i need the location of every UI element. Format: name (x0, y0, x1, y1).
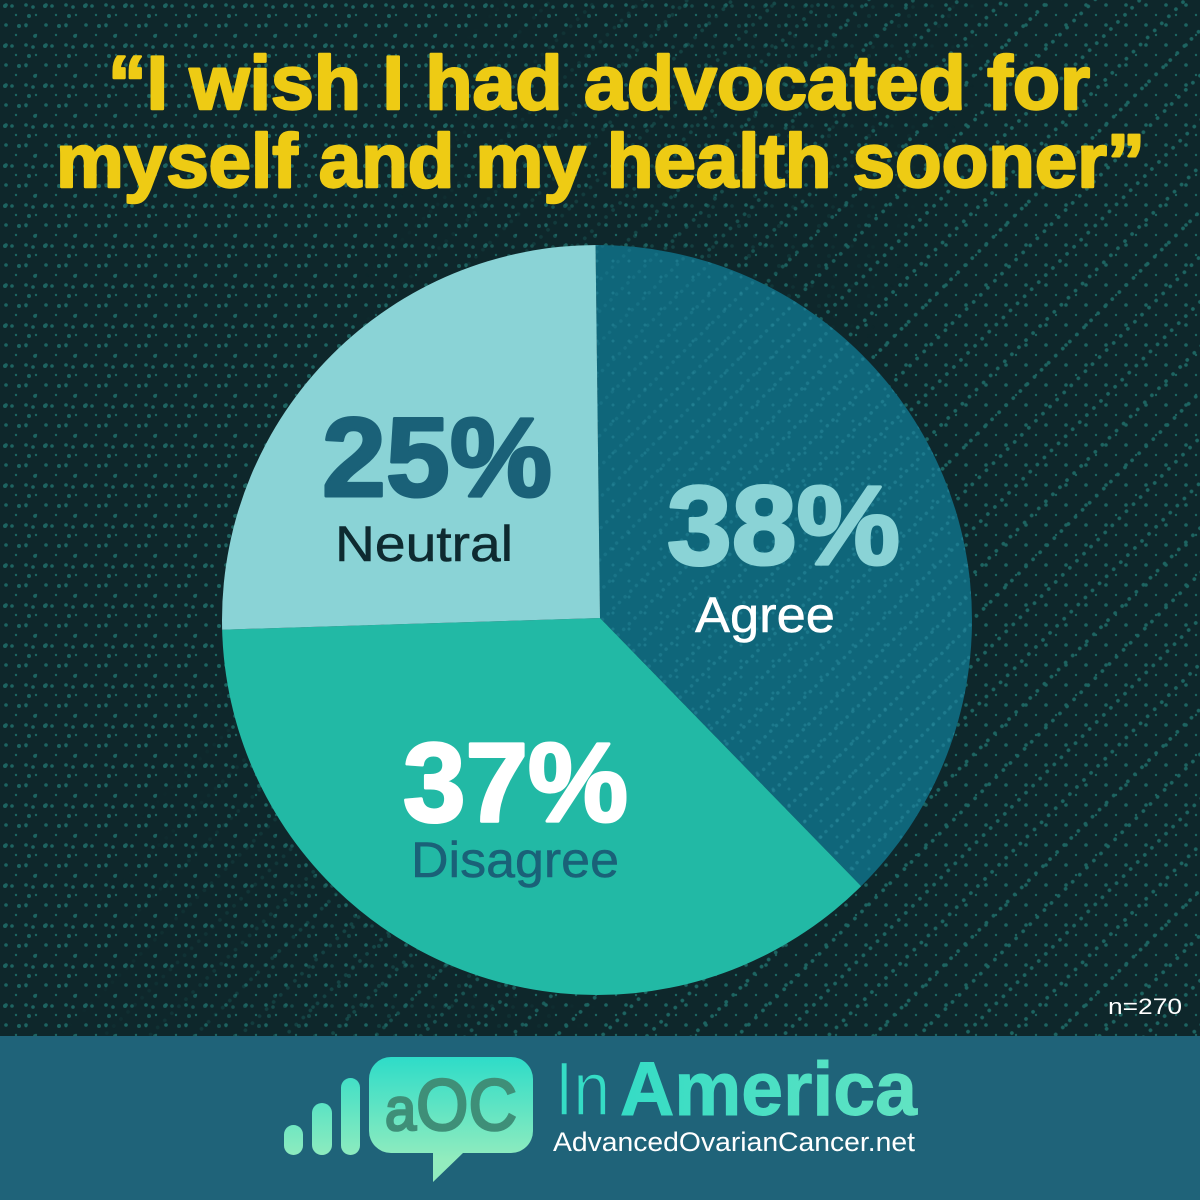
pie chart (222, 245, 972, 995)
logo: speech bubble with aOC: aOC (385, 1066, 517, 1146)
label: 37% disagree: Disagree (411, 832, 619, 888)
logo wordmark: In America: America (620, 1047, 918, 1132)
label: 38% agree (667, 463, 900, 643)
footer band (0, 1036, 1200, 1200)
label: 37% disagree: 37% (403, 720, 628, 845)
title: myself and my health sooner” (56, 119, 1145, 204)
sample size note: n=270 (1108, 994, 1182, 1019)
label: 25% neutral: Neutral (335, 516, 513, 572)
logo: speech bubble with aOC (369, 1057, 533, 1182)
label: 25% neutral: 25% (322, 395, 552, 520)
title: “I wish I had advocated for (108, 41, 1090, 126)
slice: agree 38% (596, 245, 972, 886)
logo: signal bars icon (284, 1078, 360, 1155)
slice: disagree 37% (222, 618, 861, 995)
label: 25% neutral (322, 395, 552, 572)
label: 38% agree: Agree (695, 587, 835, 643)
logo wordmark: In America: In (555, 1047, 610, 1132)
slice: neutral 25% (222, 245, 600, 630)
logo url: AdvancedOvarianCancer.net (553, 1127, 916, 1157)
label: 38% agree: 38% (667, 463, 900, 588)
title (56, 41, 1145, 204)
